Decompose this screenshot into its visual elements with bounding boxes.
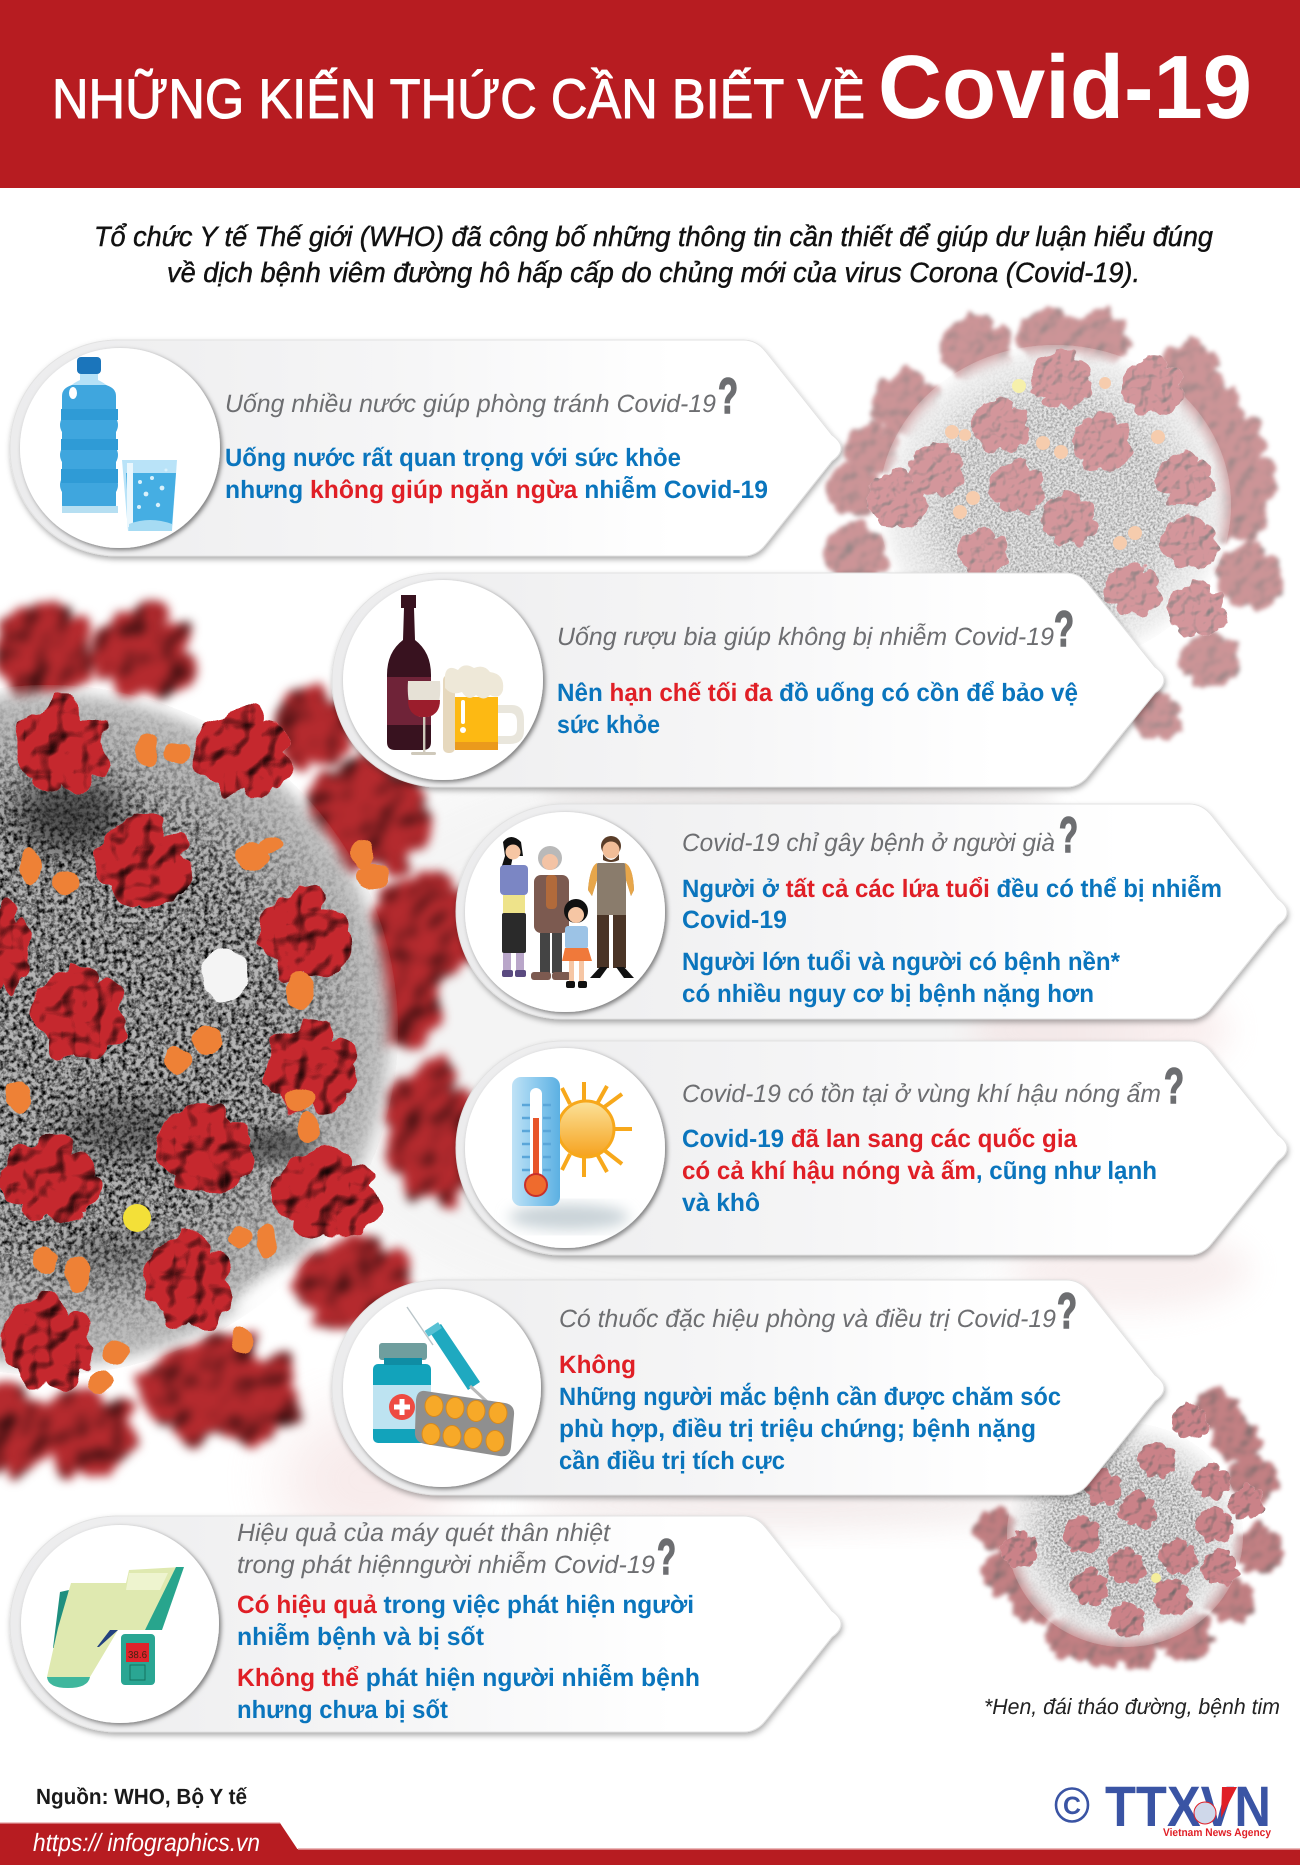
question: ? [657, 1529, 676, 1585]
question: ? [718, 368, 738, 424]
question [557, 601, 1074, 657]
grandmother [531, 846, 571, 980]
question: trong phát hiệnngười nhiễm Covid-19 [237, 1551, 655, 1579]
question [682, 1058, 1184, 1114]
question [237, 1519, 676, 1585]
question: Hiệu quả của máy quét thân nhiệt [237, 1519, 611, 1547]
blurred back spikes [0, 598, 482, 1476]
answer: Nên hạn chế tối đa đồ uống có cồn để bảo vệ [557, 679, 1078, 707]
intro text [94, 221, 1213, 288]
icon: thermometer and sun [509, 1077, 632, 1230]
logo: TTXVN: Vietnam News Agency [1163, 1827, 1272, 1839]
title: NHỮNG KIẾN THỨC CẦN BIẾT VỀ [52, 67, 865, 130]
sharp front spikes [0, 697, 380, 1389]
source: Nguồn: WHO, Bộ Y tế [36, 1784, 248, 1809]
decoration: faint central virus [250, 740, 1250, 1550]
question: Covid-19 chỉ gây bệnh ở người già [682, 829, 1055, 857]
icon: wine and beer [387, 595, 524, 755]
panel: medicine [332, 1280, 1164, 1495]
question: Uống rượu bia giúp không bị nhiễm Covid-19 [557, 623, 1054, 651]
question [559, 1283, 1077, 1339]
title [52, 38, 1252, 138]
banner [0, 0, 1300, 188]
answer [682, 874, 1222, 1008]
answer: có nhiều nguy cơ bị bệnh nặng hơn [682, 980, 1094, 1008]
small yellow spike [123, 1204, 151, 1232]
illustration: large virus left [0, 598, 482, 1476]
panel: age [456, 804, 1287, 1019]
illustration: faded virus bottom right [974, 1386, 1283, 1669]
question: ? [1054, 601, 1074, 657]
man [588, 836, 634, 978]
question [682, 807, 1078, 863]
answer [225, 444, 768, 504]
answer [559, 1351, 1061, 1475]
child [562, 899, 592, 988]
answer: nhiễm bệnh và bị sốt [237, 1622, 485, 1651]
answer: Những người mắc bệnh cần được chăm sóc [559, 1382, 1061, 1411]
answer: Không thể phát hiện người nhiễm bệnh [237, 1663, 700, 1692]
answer: Covid-19 [682, 906, 787, 934]
icon: infrared thermometer [47, 1567, 184, 1688]
answer [557, 679, 1078, 739]
illustration: faded virus top right [824, 305, 1285, 740]
intro text: về dịch bệnh viêm đường hô hấp cấp do chủng mới của virus Corona (Covid-19). [167, 257, 1140, 288]
question: ? [1164, 1058, 1184, 1114]
answer: Không [559, 1351, 636, 1379]
icon: medicine bottle, syringe and pills [373, 1307, 514, 1456]
answer [682, 1125, 1157, 1217]
question: Có thuốc đặc hiệu phòng và điều trị Covid-19 [559, 1305, 1056, 1333]
answer: nhưng chưa bị sốt [237, 1696, 449, 1724]
question: Covid-19 có tồn tại ở vùng khí hậu nóng ẩm [682, 1080, 1161, 1108]
answer: sức khỏe [557, 711, 660, 739]
small orange spikes [5, 733, 390, 1395]
answer: Covid-19 đã lan sang các quốc gia [682, 1125, 1078, 1153]
question: Uống nhiều nước giúp phòng tránh Covid-19 [225, 390, 716, 418]
logo: TTXVN: TTXVN [1105, 1775, 1271, 1839]
answer [237, 1591, 700, 1724]
website: https:// infographics.vn [33, 1829, 260, 1857]
copyright mark: C [1063, 1792, 1081, 1820]
copyright mark [1056, 1788, 1088, 1822]
panel: water [10, 340, 841, 556]
footnote: *Hen, đái tháo đường, bệnh tim [984, 1694, 1280, 1719]
footer bar [0, 1823, 1300, 1865]
icon: water bottle and glass [60, 357, 177, 531]
panel: thermal scanner [10, 1516, 841, 1732]
icon: family [500, 836, 634, 988]
woman [500, 837, 528, 977]
question: ? [1057, 1283, 1077, 1339]
answer: cần điều trị tích cực [559, 1447, 785, 1475]
answer: Người lớn tuổi và người có bệnh nền* [682, 948, 1120, 976]
panel: alcohol [332, 573, 1164, 787]
answer: Có hiệu quả trong việc phát hiện người [237, 1591, 694, 1619]
sphere [0, 685, 398, 1375]
question: ? [1059, 807, 1078, 863]
answer: Người ở tất cả các lứa tuổi đều có thể bị nhiễm [682, 874, 1222, 903]
answer: và khô [682, 1189, 760, 1217]
title: Covid-19 [878, 38, 1252, 138]
question [225, 368, 738, 424]
icon: infrared thermometer: 38.6 [128, 1650, 147, 1661]
intro text: Tổ chức Y tế Thế giới (WHO) đã công bố những thông tin cần thiết để giúp dư luận hiểu đúng [94, 221, 1213, 252]
panel: climate [456, 1041, 1287, 1255]
answer: nhưng không giúp ngăn ngừa nhiễm Covid-19 [225, 475, 768, 504]
answer: phù hợp, điều trị triệu chứng; bệnh nặng [559, 1415, 1036, 1443]
answer: Uống nước rất quan trọng với sức khỏe [225, 444, 681, 472]
answer: có cả khí hậu nóng và ấm, cũng như lạnh [682, 1157, 1157, 1185]
